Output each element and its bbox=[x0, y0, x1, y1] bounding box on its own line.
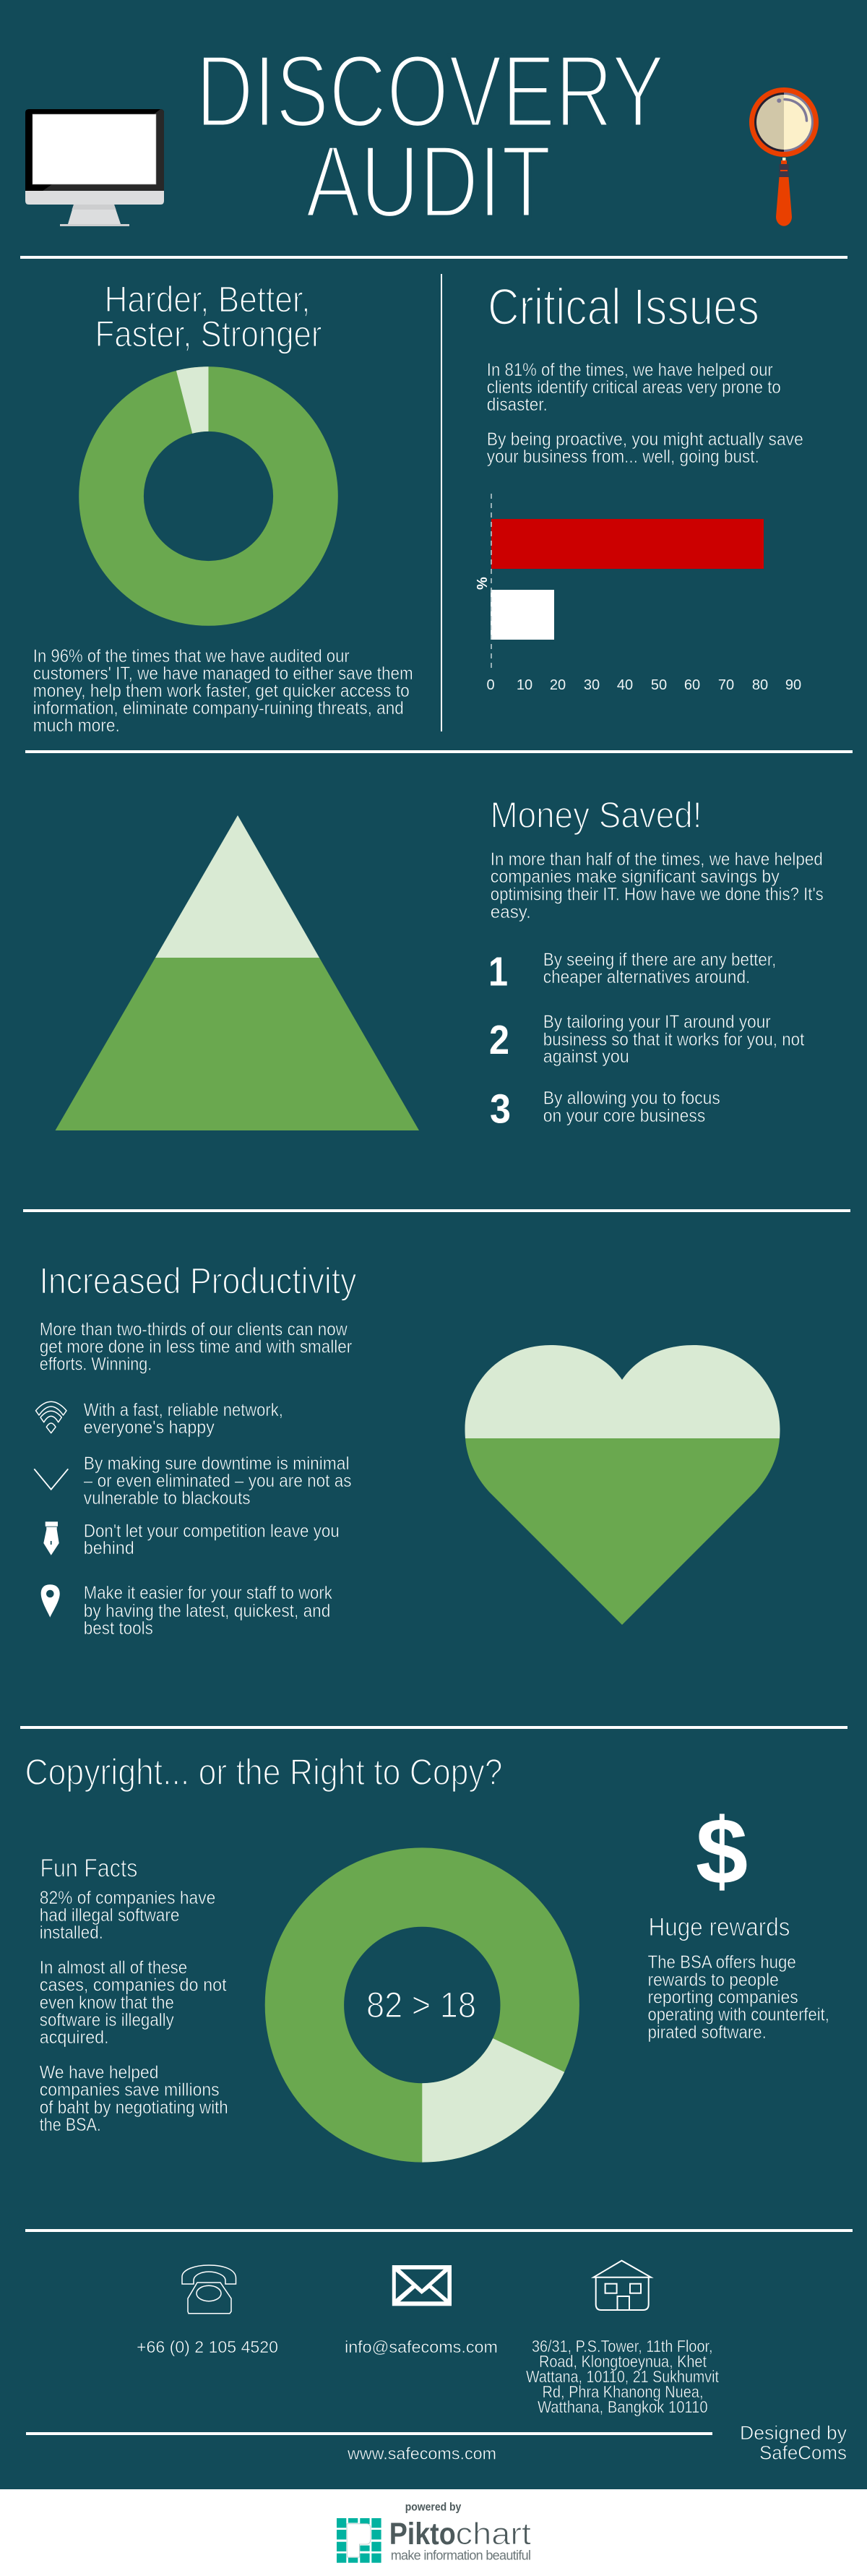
list item 2 bbox=[489, 1012, 804, 1067]
text block: fun facts: had illegal software bbox=[40, 1905, 179, 1925]
text: piktochart wordmark: Pikto bbox=[389, 2517, 456, 2551]
bar chart: 30 bbox=[584, 677, 600, 693]
text block: huge rewards: operating with counterfeit, bbox=[648, 2005, 829, 2025]
title bbox=[196, 34, 665, 239]
icon: magnifying glass bbox=[749, 87, 819, 226]
icon: envelope bbox=[392, 2265, 452, 2306]
text block: companies make significant savings by bbox=[491, 867, 780, 887]
text block: huge rewards: pirated software. bbox=[648, 2022, 767, 2043]
text: designed by: Designed by bbox=[740, 2422, 847, 2444]
donut chart 96 percent bbox=[111, 366, 306, 593]
donut chart 82 to 18 bbox=[304, 1887, 564, 2163]
text block: fun facts: 82% of companies have bbox=[40, 1888, 215, 1908]
list item: tools bbox=[84, 1583, 332, 1639]
text: address bbox=[526, 2337, 720, 2416]
text block: huge rewards: reporting companies bbox=[648, 1988, 798, 2008]
text: email: info@safecoms.com bbox=[345, 2337, 498, 2356]
text block: fun facts: even know that the bbox=[40, 1993, 174, 2013]
list item 1: cheaper alternatives around. bbox=[543, 967, 750, 987]
panel: copyright bbox=[25, 1751, 829, 2163]
text: phone: +66 (0) 2 105 4520 bbox=[137, 2337, 278, 2356]
text: designed by bbox=[740, 2422, 847, 2464]
text block: fun facts: software is illegally bbox=[40, 2010, 174, 2030]
list item: competition bbox=[84, 1521, 340, 1558]
text block: huge rewards: rewards to people bbox=[648, 1970, 779, 1991]
pyramid chart bbox=[55, 815, 419, 1130]
text block bbox=[33, 646, 413, 736]
text block: get more done in less time and with smaller bbox=[40, 1337, 352, 1357]
text block: fun facts: the BSA. bbox=[40, 2115, 101, 2135]
heading: Money Saved! bbox=[490, 794, 702, 836]
list item 1: 1 bbox=[488, 948, 508, 995]
bar chart: 80 bbox=[752, 677, 768, 693]
list item: competition: behind bbox=[84, 1538, 134, 1558]
list item: competition: Don't let your competition leave you bbox=[84, 1521, 340, 1541]
text block: In 96% of the times that we have audited our bbox=[33, 646, 350, 666]
title: AUDIT bbox=[306, 124, 551, 239]
bar chart: 50 bbox=[651, 677, 667, 693]
text block bbox=[491, 849, 824, 922]
bar chart: % bbox=[475, 577, 491, 590]
bar chart: 10 bbox=[517, 677, 532, 693]
text block: disaster. bbox=[487, 395, 548, 415]
list item 2: By tailoring your IT around your bbox=[543, 1012, 771, 1032]
text: address: Wattana, 10110, 21 Sukhumvit bbox=[526, 2367, 720, 2386]
heading: Copyright... or the Right to Copy? bbox=[25, 1751, 503, 1793]
text block: fun facts: of baht by negotiating with bbox=[40, 2098, 228, 2118]
panel: increased productivity bbox=[34, 1261, 780, 1639]
text: website: www.safecoms.com bbox=[347, 2444, 496, 2463]
list item: tools: Make it easier for your staff to work bbox=[84, 1583, 332, 1603]
text block: fun facts: companies save millions bbox=[40, 2080, 220, 2100]
text block: fun facts: acquired. bbox=[40, 2027, 109, 2048]
panel: critical issues bbox=[475, 279, 803, 693]
bar chart: 20 bbox=[550, 677, 566, 693]
icon: wifi bbox=[36, 1401, 66, 1433]
list item: downtime: vulnerable to blackouts bbox=[84, 1488, 251, 1508]
icon: telephone bbox=[182, 2265, 236, 2314]
list item 2: 2 bbox=[489, 1017, 509, 1063]
text block: fun facts bbox=[40, 1888, 228, 2135]
heart chart bbox=[465, 1345, 780, 1625]
text block: much more. bbox=[33, 716, 120, 736]
text block: fun facts: We have helped bbox=[40, 2063, 158, 2083]
icon: house bbox=[594, 2261, 651, 2310]
bar chart: 70 bbox=[718, 677, 734, 693]
text block: customers' IT, we have managed to either save them bbox=[33, 664, 413, 684]
bar chart: 0 bbox=[486, 677, 495, 693]
header bbox=[25, 34, 819, 239]
text block: efforts. Winning. bbox=[40, 1354, 152, 1375]
title: DISCOVERY bbox=[196, 34, 665, 149]
text: piktochart wordmark: make information beautiful bbox=[391, 2549, 531, 2563]
list item 3 bbox=[490, 1086, 720, 1132]
text: piktochart wordmark bbox=[389, 2517, 531, 2563]
heading bbox=[95, 279, 322, 354]
text block bbox=[40, 1320, 352, 1375]
heading: Critical Issues bbox=[488, 279, 759, 336]
panel: contact bbox=[137, 2261, 720, 2416]
text: piktochart wordmark: chart bbox=[456, 2517, 531, 2551]
list item: network: With a fast, reliable network, bbox=[84, 1400, 283, 1420]
list item: downtime: By making sure downtime is minimal bbox=[84, 1454, 350, 1474]
text: powered by: powered by bbox=[405, 2501, 461, 2513]
text block: easy. bbox=[491, 902, 531, 922]
icon: map pin bbox=[41, 1584, 60, 1618]
list item: downtime: – or even eliminated – you are not as bbox=[84, 1471, 352, 1491]
icon: dollar sign: $ bbox=[696, 1798, 748, 1904]
icon: pen nib bbox=[43, 1521, 59, 1555]
icon: chevron bbox=[34, 1469, 68, 1490]
list item: network: everyone's happy bbox=[84, 1417, 215, 1438]
text block: More than two-thirds of our clients can now bbox=[40, 1320, 348, 1340]
text block: In 81% of the times, we have helped our bbox=[487, 360, 773, 380]
list item 3: By allowing you to focus bbox=[543, 1089, 720, 1109]
text block: huge rewards bbox=[647, 1952, 829, 2043]
list item 1: By seeing if there are any better, bbox=[543, 950, 776, 970]
subheading: fun facts: Fun Facts bbox=[40, 1855, 137, 1883]
list item: network bbox=[84, 1400, 283, 1438]
bar chart: 90 bbox=[785, 677, 801, 693]
text: address: Rd, Phra Khanong Nuea, bbox=[542, 2382, 704, 2401]
list item 2: against you bbox=[543, 1047, 629, 1067]
icon: computer monitor bbox=[25, 109, 164, 226]
text block bbox=[487, 360, 803, 467]
text block: optimising their IT. How have we done this? It's bbox=[491, 885, 824, 905]
panel: money saved bbox=[55, 794, 824, 1132]
text: designed by: SafeComs bbox=[759, 2442, 847, 2464]
list item 3: on your core business bbox=[543, 1106, 705, 1126]
text block: clients identify critical areas very prone to bbox=[487, 377, 781, 398]
bar chart: 40 bbox=[617, 677, 633, 693]
donut chart 82 to 18: 82 > 18 bbox=[366, 1985, 476, 2025]
panel: harder better faster stronger bbox=[33, 279, 413, 736]
text block: fun facts: installed. bbox=[40, 1923, 103, 1943]
subheading: huge rewards: Huge rewards bbox=[649, 1913, 790, 1941]
bar chart bbox=[475, 494, 801, 693]
icon: piktochart logo bbox=[337, 2518, 381, 2563]
list item 3: 3 bbox=[490, 1086, 511, 1132]
text block: By being proactive, you might actually save bbox=[487, 429, 803, 450]
text block: money, help them work faster, get quicker access to bbox=[33, 681, 410, 701]
list item: downtime bbox=[84, 1454, 352, 1508]
list item 2: business so that it works for you, not bbox=[543, 1029, 804, 1049]
text: address: 36/31, P.S.Tower, 11th Floor, bbox=[532, 2337, 712, 2356]
footer: powered by piktochart bbox=[0, 2489, 867, 2576]
text block: your business from... well, going bust. bbox=[487, 447, 759, 467]
heading: Faster, Stronger bbox=[95, 314, 322, 354]
text: address: Watthana, Bangkok 10110 bbox=[538, 2397, 708, 2416]
bar chart: 60 bbox=[684, 677, 700, 693]
heading: Increased Productivity bbox=[39, 1261, 357, 1301]
text: address: Road, Klongtoeynua, Khet bbox=[539, 2352, 707, 2371]
list item: tools: best tools bbox=[84, 1618, 153, 1639]
list item 1 bbox=[488, 948, 776, 995]
text block: huge rewards: The BSA offers huge bbox=[648, 1952, 796, 1972]
list item: tools: by having the latest, quickest, and bbox=[84, 1601, 330, 1621]
text block: In more than half of the times, we have helped bbox=[491, 849, 823, 870]
heading: Harder, Better, bbox=[104, 279, 311, 319]
text block: information, eliminate company-ruining threats, and bbox=[33, 698, 404, 718]
text block: fun facts: cases, companies do not bbox=[40, 1975, 227, 1996]
text block: fun facts: In almost all of these bbox=[40, 1957, 187, 1978]
